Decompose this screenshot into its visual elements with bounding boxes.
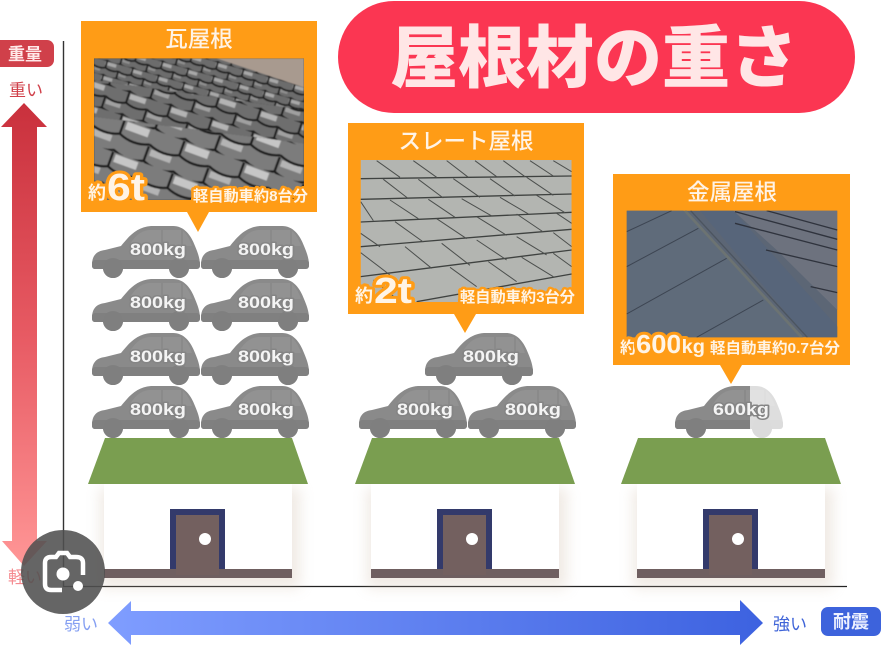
photo: metal roof: [627, 211, 837, 337]
car equivalent text: 軽自動車約0.7台分: [710, 339, 840, 357]
car stack: clay tile: [92, 226, 309, 438]
car: [201, 333, 309, 385]
weak label: 弱い: [64, 615, 98, 634]
weight axis: [0, 40, 54, 587]
durability axis: [64, 600, 881, 645]
photo: clay tile roof: [94, 58, 304, 200]
red vertical arrow: [1, 103, 47, 566]
title banner: 屋根材の重さ: [390, 21, 798, 97]
house: slate: [355, 438, 575, 588]
car: 800kg: [505, 401, 561, 419]
weight text: 2t: 約: [355, 286, 373, 306]
panel: slate roof: [348, 123, 584, 333]
car: 800kg: [238, 241, 294, 259]
panel: metal roof: [613, 174, 850, 384]
car: [201, 279, 309, 331]
icon: camera lens overlay: [21, 530, 105, 614]
panel: clay tile roof: [81, 21, 317, 232]
photo: slate roof: [361, 160, 572, 302]
car label: 600kg: [713, 401, 769, 419]
title banner: [338, 1, 855, 113]
car: [92, 279, 200, 331]
weight text: 600kg: 約: [620, 339, 636, 357]
weight text: 6t: [88, 167, 145, 209]
car: [425, 333, 533, 385]
car equivalent text: 軽自動車約3台分: [460, 288, 575, 306]
car: [359, 386, 467, 438]
car: 800kg: [130, 294, 186, 312]
car: 800kg: [238, 401, 294, 419]
heavy label: 重い: [9, 81, 43, 100]
car: [201, 386, 309, 438]
car stack: slate: [359, 333, 576, 438]
car: 800kg: [130, 401, 186, 419]
car: [201, 226, 309, 278]
car: 800kg: [130, 241, 186, 259]
house: metal: [621, 438, 841, 588]
weight badge: 重量: [8, 45, 42, 64]
horizontal axis line: [63, 586, 847, 588]
blue horizontal arrow: [108, 600, 763, 645]
durability badge: 耐震: [833, 612, 869, 632]
light label: 軽い: [8, 568, 42, 587]
car: 800kg: [130, 348, 186, 366]
weight text: 6t: 6t: [107, 167, 145, 209]
car: 800kg: [238, 294, 294, 312]
heading: clay tile: 瓦屋根: [165, 27, 233, 52]
car: 800kg: [463, 348, 519, 366]
weight text: 2t: [355, 270, 412, 311]
car: 800kg: [238, 348, 294, 366]
car: [92, 333, 200, 385]
car: [468, 386, 576, 438]
car equivalent text: 軽自動車約8台分: [193, 187, 308, 205]
weight text: 2t: 2t: [374, 270, 412, 311]
car: 800kg: [397, 401, 453, 419]
weight text: 6t: 約: [88, 183, 106, 203]
car stack: metal: [675, 384, 786, 440]
car: [92, 226, 200, 278]
house: clay tile: [88, 438, 308, 588]
car: [92, 386, 200, 438]
weight badge: [0, 40, 54, 67]
durability badge: [821, 607, 881, 636]
strong label: 強い: [773, 615, 807, 634]
vertical axis line: [62, 41, 64, 587]
weight text: 600kg: 600kg: [636, 329, 705, 359]
heading: slate: スレート屋根: [398, 129, 534, 154]
heading: metal: 金属屋根: [687, 180, 777, 205]
